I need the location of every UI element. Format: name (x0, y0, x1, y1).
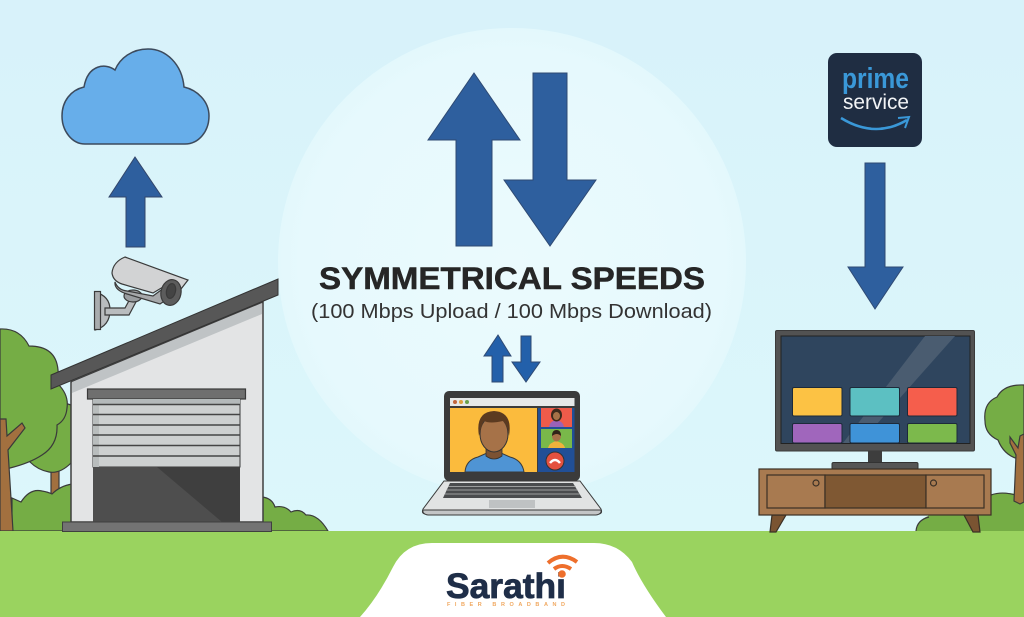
arrow: large download (504, 73, 596, 246)
browser bar (450, 398, 574, 406)
panel: streaming service (759, 53, 991, 532)
laptop base (422, 481, 602, 514)
roof shadow (72, 303, 262, 393)
console legs (770, 515, 786, 532)
icon: wifi signal (548, 557, 577, 576)
app tile teal (850, 388, 900, 416)
central glow circle (278, 28, 746, 496)
door header (88, 389, 246, 399)
door opening (93, 467, 240, 522)
arrow: large upload (428, 73, 520, 246)
amazon-style smile (841, 118, 907, 129)
icon: security camera (94, 257, 188, 330)
roof (51, 279, 278, 389)
right tree canopy (985, 385, 1024, 460)
back tree trunk (51, 470, 59, 494)
tv neck (868, 451, 882, 463)
title: SYMMETRICAL SPEEDS (319, 260, 705, 296)
console body (759, 469, 991, 515)
arrow: up to cloud (109, 157, 162, 247)
back tree canopy (30, 400, 71, 472)
app tile purple (792, 424, 842, 443)
subtitle: (100 Mbps Upload / 100 Mbps Download) (311, 300, 712, 323)
trackpad (489, 500, 535, 508)
app tile blue (850, 424, 900, 443)
screen glare (843, 336, 955, 443)
main video (450, 408, 537, 472)
end call button (546, 452, 564, 470)
laptop lid (444, 391, 580, 481)
app tile yellow (792, 388, 842, 416)
garage wall (71, 302, 263, 522)
icon: cloud (62, 49, 209, 144)
panel: cloud upload (62, 49, 209, 247)
keyboard (443, 483, 582, 498)
right garage bush (262, 497, 328, 531)
app tile red (908, 388, 957, 416)
panel: logo badge (360, 543, 666, 617)
left bush (12, 484, 72, 531)
logo tagline: FIBER BROADBAND (447, 602, 565, 608)
roller door (93, 399, 240, 467)
front tree canopy (0, 329, 67, 470)
icon: television (776, 330, 974, 470)
icon: laptop (422, 391, 602, 515)
main person (465, 453, 524, 472)
panel: left trees and bushes (0, 329, 328, 531)
arrow: small upload (484, 335, 511, 382)
participant 2 (541, 429, 572, 448)
arrow: small download (512, 336, 540, 382)
panel: laptop video call (422, 335, 602, 515)
logo wordmark: Sarathi (446, 567, 566, 606)
tv frame (776, 330, 974, 451)
front tree trunk (0, 419, 25, 531)
icon: tv console (759, 469, 991, 532)
participant 1 (541, 408, 572, 427)
door knobs (813, 480, 819, 486)
right tree trunk (1010, 434, 1024, 504)
left door (767, 475, 825, 508)
app tile green (908, 424, 957, 443)
tv screen (781, 336, 970, 444)
garage base (62, 522, 272, 532)
arrow: down to tv (848, 163, 903, 309)
prime wordmark: prime (842, 63, 909, 95)
right bush (916, 493, 1024, 531)
tv foot (832, 462, 918, 470)
right door (926, 475, 984, 508)
panel: right trees and bushes (916, 385, 1024, 531)
icon: prime service logo (828, 53, 922, 147)
panel: garage with camera (51, 257, 278, 532)
centre cubby (825, 475, 926, 508)
white badge (360, 543, 666, 617)
service wordmark: service (843, 91, 909, 114)
panel: central speed message (311, 73, 712, 323)
side video panel (538, 408, 574, 472)
ground (0, 531, 1024, 617)
